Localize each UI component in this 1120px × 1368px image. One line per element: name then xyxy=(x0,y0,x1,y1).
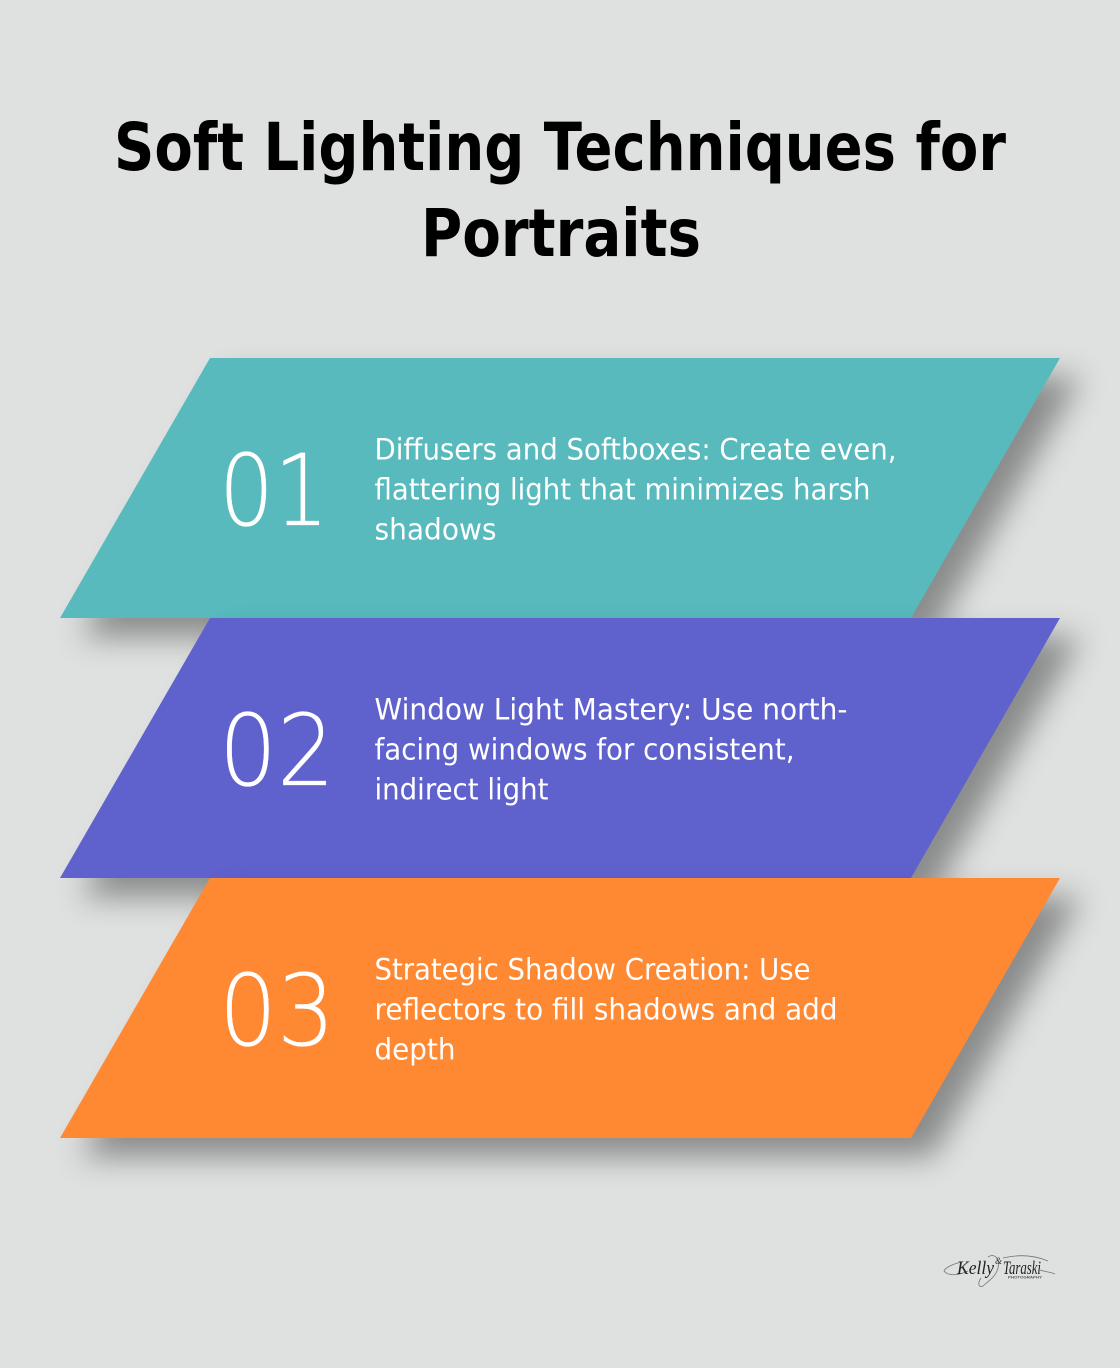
step 02 text: facing windows for consistent, xyxy=(374,732,794,766)
step 02 text: indirect light xyxy=(374,772,548,806)
step 02 text xyxy=(374,692,848,806)
logo: photographer signature: Taraski xyxy=(1003,1258,1041,1279)
logo: photographer signature: & xyxy=(995,1256,1002,1266)
step 01 text: flattering light that minimizes harsh xyxy=(374,472,870,506)
step 01 text xyxy=(374,432,896,546)
teal parallelogram xyxy=(60,358,1060,618)
purple parallelogram xyxy=(60,618,1060,878)
step 02 text: Window Light Mastery: Use north- xyxy=(374,692,848,726)
logo: photographer signature: Kelly xyxy=(956,1258,995,1279)
step 01 text: Diffusers and Softboxes: Create even, xyxy=(374,432,896,466)
step 03 text: Strategic Shadow Creation: Use xyxy=(374,952,810,986)
step 03 text xyxy=(374,952,838,1066)
logo: photographer signature xyxy=(944,1256,1055,1287)
logo: photographer signature: PHOTOGRAPHY xyxy=(1008,1276,1043,1280)
title: Portraits xyxy=(421,195,701,272)
panel: step 01 diffusers and softboxes xyxy=(60,358,1060,618)
orange parallelogram xyxy=(60,878,1060,1138)
number 02: 02 xyxy=(219,694,335,809)
step 03 text: depth xyxy=(374,1032,456,1066)
step 03 text: reflectors to fill shadows and add xyxy=(374,992,838,1026)
number 01: 01 xyxy=(219,434,329,549)
panel: step 02 window light mastery xyxy=(60,618,1060,878)
panel: step 03 strategic shadow creation xyxy=(60,878,1060,1138)
number 03: 03 xyxy=(219,954,335,1069)
step 01 text: shadows xyxy=(374,512,496,546)
title xyxy=(114,109,1006,272)
